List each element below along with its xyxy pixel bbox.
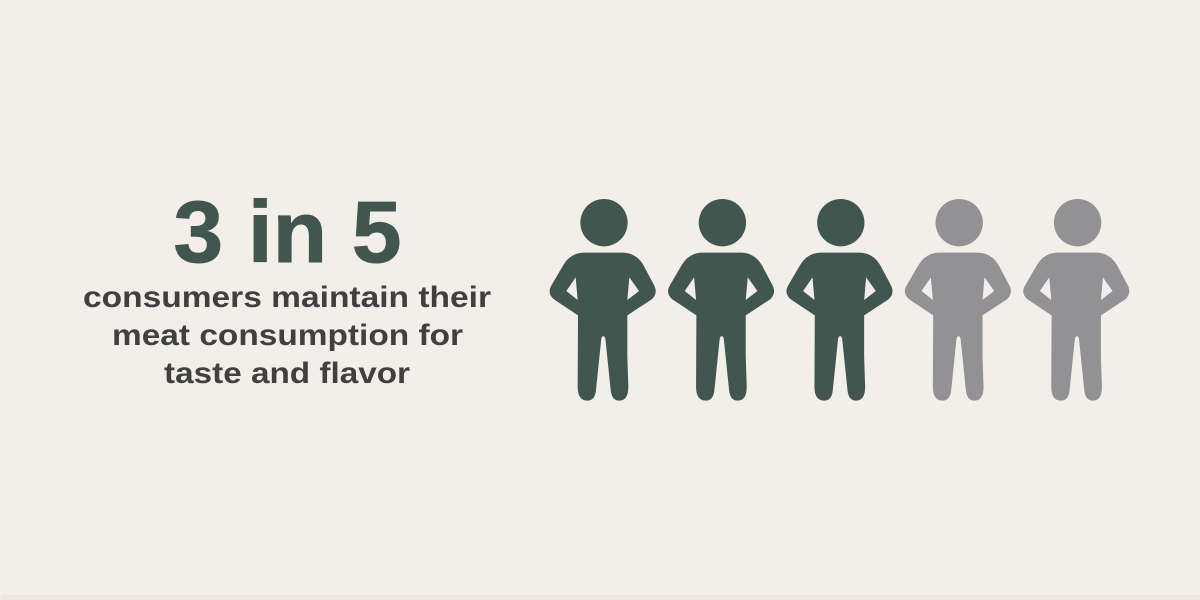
description text: taste and flavor: [164, 357, 410, 390]
description text: consumers maintain their: [83, 281, 491, 314]
icon: person 3 highlighted: [786, 199, 893, 401]
description text: meat consumption for: [112, 319, 463, 352]
pictogram row: 3 of 5 people highlighted: [550, 199, 1129, 401]
icon: person 4 grey: [905, 199, 1011, 401]
icon: person 5 grey: [1023, 199, 1129, 401]
icon: person 1 highlighted: [550, 199, 656, 401]
icon: person 2 highlighted: [668, 199, 774, 401]
description text: [83, 281, 491, 390]
headline statistic: 3 in 5: [174, 184, 402, 281]
